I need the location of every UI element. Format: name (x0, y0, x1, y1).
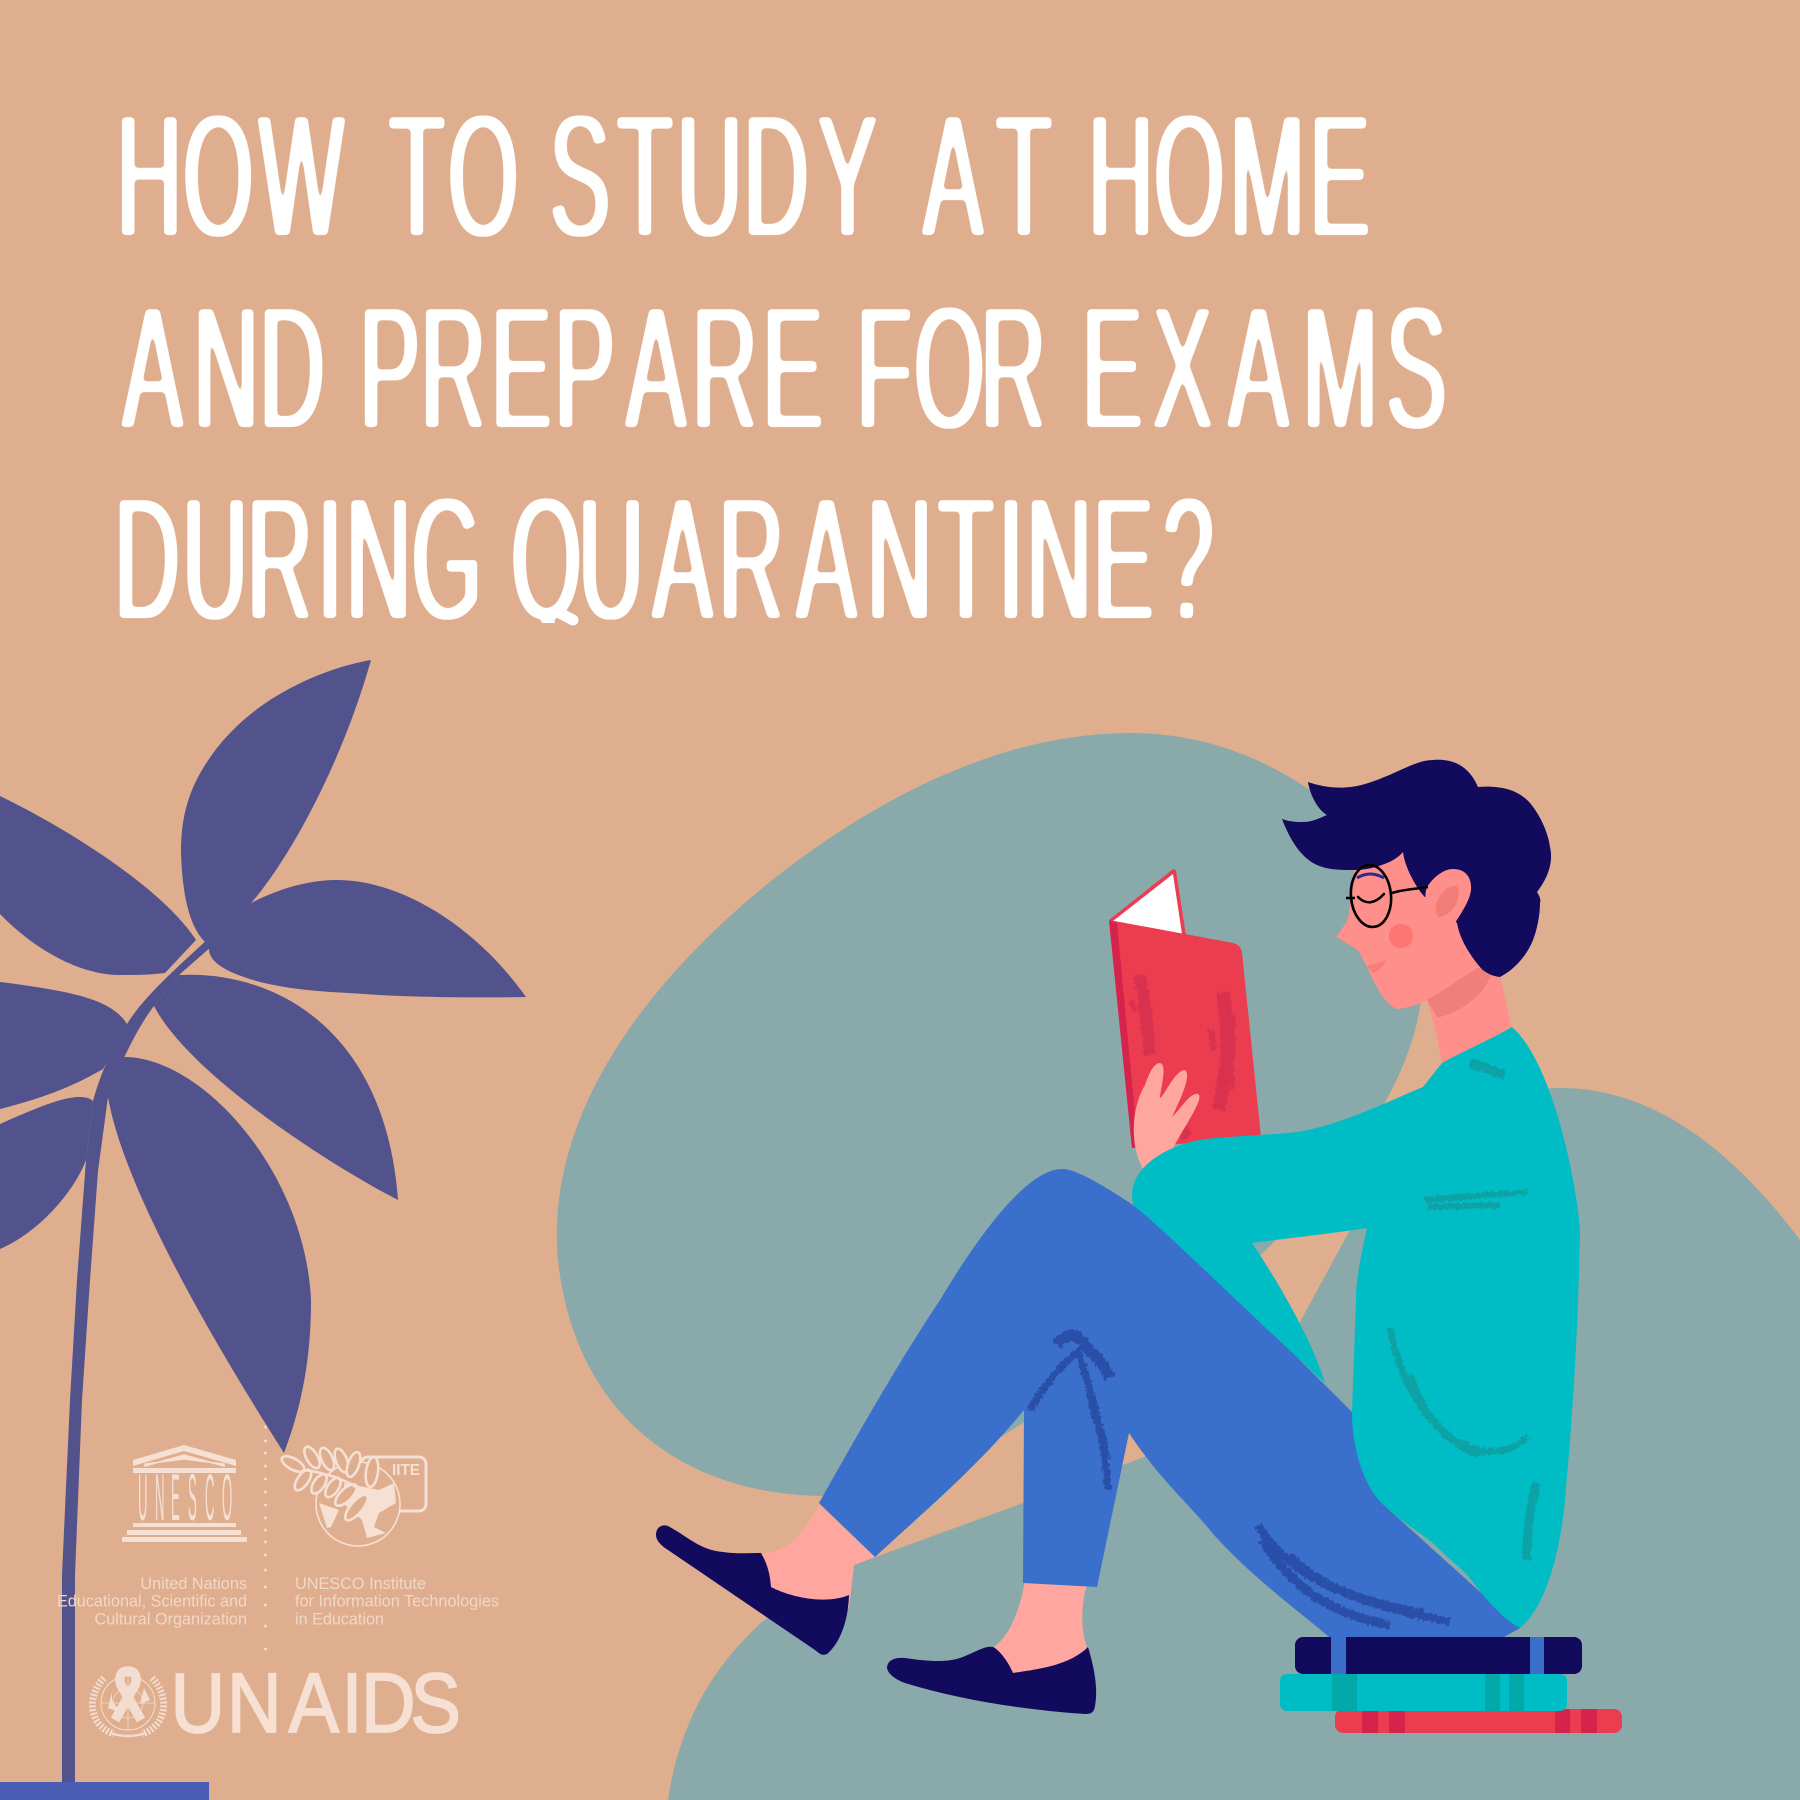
leaf right (209, 880, 526, 997)
book scuffs (1131, 975, 1234, 1138)
logo: UNESCO temple (122, 1445, 247, 1542)
UNESCO column letters: UNESCO (138, 1462, 232, 1535)
right ankle (994, 1580, 1090, 1685)
leaf middle left (0, 982, 127, 1109)
logo: UNAIDS emblem (92, 1671, 164, 1736)
navy book (1295, 1637, 1582, 1674)
eyebrow (1357, 874, 1384, 878)
dotted divider (264, 1426, 267, 1650)
globe (316, 1462, 400, 1546)
leaf upper left (0, 796, 196, 975)
logo: UNAIDS wordmark: UNAIDS (170, 1656, 461, 1750)
IITE name text: UNESCO Institute (295, 1575, 426, 1593)
UNESCO name text (57, 1575, 247, 1628)
IITE name text (295, 1575, 499, 1628)
UNESCO name text: United Nations (140, 1575, 247, 1593)
plant stem (62, 938, 212, 1785)
background blob: lower (668, 1088, 1800, 1800)
UNESCO name text: Cultural Organization (94, 1610, 247, 1628)
open book (1109, 869, 1261, 1148)
trouser creases (1030, 1335, 1450, 1625)
title line 1: HOW TO STUDY AT HOME (117, 79, 1370, 274)
logo: IITE globe and olive branch (279, 1444, 426, 1546)
glasses (1346, 863, 1428, 929)
leaf top (181, 660, 371, 950)
book back cover (1109, 869, 1186, 936)
olive branch (279, 1444, 380, 1524)
closed eye (1358, 894, 1384, 902)
cheek (1389, 924, 1413, 948)
title line 2: AND PREPARE FOR EXAMS (122, 271, 1446, 466)
IITE name text: in Education (295, 1610, 384, 1628)
sweater (1132, 1027, 1580, 1628)
hand (1134, 1063, 1199, 1172)
book front cover (1109, 920, 1261, 1148)
red book (1335, 1709, 1622, 1733)
UNESCO name text: Educational, Scientific and (57, 1592, 247, 1610)
right shoe (887, 1647, 1096, 1714)
book spine (1109, 920, 1138, 1148)
left ankle (761, 1505, 875, 1608)
title line 3: DURING QUARANTINE? (114, 462, 1213, 657)
IITE badge (361, 1457, 426, 1511)
potted plant (0, 660, 526, 1785)
sweater creases (1390, 1063, 1537, 1560)
neck shadow (1427, 968, 1492, 1017)
leaf lower (108, 1057, 311, 1453)
leaf lowest left (0, 1097, 93, 1249)
IITE label: IITE (392, 1462, 420, 1479)
background blob: upper (557, 733, 1422, 1496)
left shoe (656, 1525, 849, 1655)
hair (1282, 760, 1551, 977)
title (114, 79, 1446, 657)
teal book (1280, 1674, 1567, 1711)
neck and face (1336, 840, 1512, 1067)
IITE name text: for Information Technologies (295, 1592, 499, 1610)
book stack (1280, 1637, 1622, 1733)
mouth (1367, 960, 1387, 973)
trousers (819, 1169, 1520, 1637)
person reading (656, 760, 1580, 1714)
book page (1113, 874, 1182, 934)
plant pot (0, 1782, 209, 1800)
ear (1425, 869, 1471, 923)
inner ear (1436, 886, 1459, 917)
leaf centre (154, 975, 398, 1200)
